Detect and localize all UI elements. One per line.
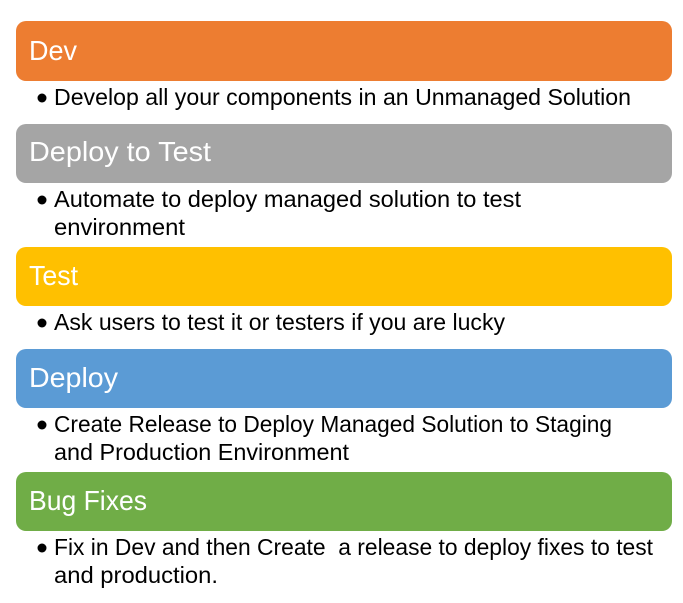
bullet <box>38 420 46 430</box>
text: Deploy description: Create Release to Deploy Managed Solution to Staging <box>54 411 612 437</box>
panel: Bug Fixes <box>16 472 672 588</box>
text: Deploy to Test description: environment <box>54 214 186 240</box>
panel: Deploy to Test <box>16 124 672 240</box>
text: Test description: Ask users to test it or testers if you are lucky <box>54 309 506 335</box>
bullet <box>38 318 46 328</box>
panel: Deploy <box>16 349 672 465</box>
heading: Dev: Dev <box>29 35 77 66</box>
header bar: Deploy <box>16 349 672 408</box>
heading: Deploy to Test: Deploy to Test <box>29 136 211 167</box>
heading: Deploy: Deploy <box>29 362 118 393</box>
text: Bug Fixes description: and production. <box>54 562 218 588</box>
heading: Test: Test <box>29 260 78 291</box>
bullet <box>38 94 46 102</box>
header bar: Dev <box>16 21 672 81</box>
panel: Test <box>16 247 672 335</box>
text: Dev description: Develop all your components in an Unmanaged Solution <box>54 84 631 110</box>
header bar: Test <box>16 247 672 306</box>
panel: Dev <box>16 21 672 110</box>
bullet <box>38 196 46 204</box>
bullet <box>38 544 46 552</box>
text: Bug Fixes description: Fix in Dev and then Create a release to deploy fixes to test <box>54 534 654 560</box>
header bar: Bug Fixes <box>16 472 672 531</box>
text: Deploy description: and Production Environment <box>54 439 350 465</box>
heading: Bug Fixes: Bug Fixes <box>29 485 147 516</box>
text: Deploy to Test description: Automate to deploy managed solution to test <box>54 186 522 212</box>
header bar: Deploy to Test <box>16 124 672 183</box>
